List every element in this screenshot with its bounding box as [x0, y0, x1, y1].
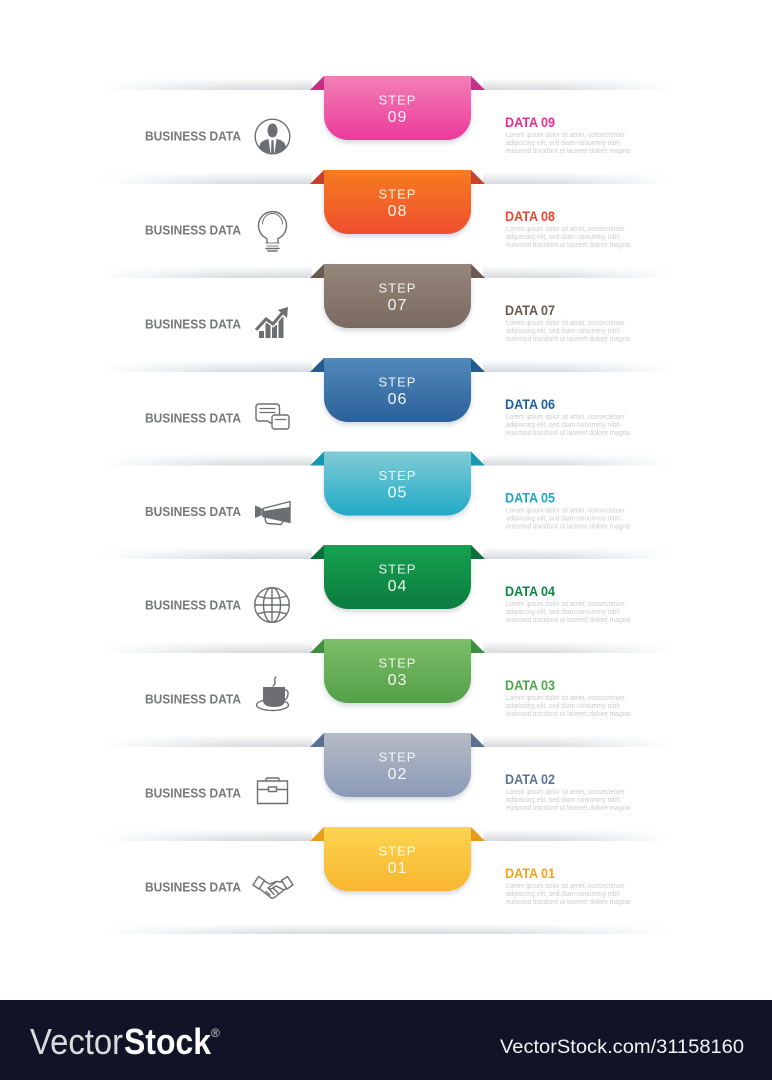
- text: data 01: Lorem ipsum dolor sit amet, consectetuer: [506, 881, 625, 890]
- tab: step 09: 09: [388, 109, 407, 126]
- text: data 05: [505, 490, 631, 530]
- text: data 02: Lorem ipsum dolor sit amet, consectetuer: [506, 787, 625, 796]
- tab: step 06: [310, 358, 485, 425]
- text: data 03: DATA 03: [505, 677, 555, 693]
- footer logo: Stock: [124, 1021, 212, 1062]
- text: data 05: euismod tincidunt ut laoreet dolore magna: [506, 522, 631, 530]
- text: data 02: adipiscing elit, sed diam nonummy nibh: [506, 795, 620, 804]
- tab: step 03: STEP: [379, 656, 416, 670]
- text: data 03: euismod tincidunt ut laoreet dolore magna: [506, 709, 631, 718]
- row: step 04: [100, 545, 673, 624]
- label: business data: BUSINESS DATA: [145, 130, 241, 144]
- text: data 03: Lorem ipsum dolor sit amet, consectetuer: [506, 693, 625, 702]
- icon: megaphone: [255, 502, 290, 524]
- tab: step 08: 08: [388, 203, 407, 220]
- text: data 01: DATA 01: [505, 865, 555, 881]
- label: business data: BUSINESS DATA: [145, 505, 241, 519]
- row: step 03: [100, 639, 673, 718]
- text: data 06: Lorem ipsum dolor sit amet, consectetuer: [506, 412, 625, 421]
- tab: step 01: [310, 827, 485, 894]
- label: business data: BUSINESS DATA: [145, 598, 241, 612]
- text: data 07: euismod tincidunt ut laoreet dolore magna: [506, 334, 631, 343]
- text: data 04: [505, 583, 631, 624]
- tab: step 02: [310, 733, 485, 800]
- text: data 09: euismod tincidunt ut laoreet dolore magna: [506, 146, 631, 155]
- row: step 08: [100, 170, 673, 251]
- text: data 08: adipiscing elit, sed diam nonummy nibh: [506, 232, 620, 241]
- text: data 07: [505, 302, 631, 343]
- tab: step 07: STEP: [379, 280, 416, 296]
- text: data 01: euismod tincidunt ut laoreet dolore magna: [506, 897, 631, 906]
- text: data 03: adipiscing elit, sed diam nonummy nibh: [506, 701, 620, 710]
- tab: step 02: 02: [388, 766, 407, 783]
- footer id: VectorStock.com/31158160: [500, 1037, 744, 1058]
- text: data 07: Lorem ipsum dolor sit amet, consectetuer: [506, 318, 625, 327]
- text: data 04: euismod tincidunt ut laoreet dolore magna: [506, 615, 631, 624]
- icon: growth chart: [256, 307, 288, 338]
- footer logo: Vector: [30, 1021, 123, 1062]
- tab: step 04: 04: [388, 578, 407, 595]
- tab: step 04: STEP: [379, 562, 416, 576]
- text: data 09: Lorem ipsum dolor sit amet, consectetuer: [506, 130, 625, 139]
- text: data 02: [505, 771, 631, 812]
- text: data 08: [505, 208, 631, 249]
- text: data 07: DATA 07: [505, 302, 555, 318]
- text: data 02: euismod tincidunt ut laoreet dolore magna: [506, 803, 631, 812]
- icon: handshake: [253, 876, 293, 898]
- text: data 03: [505, 677, 631, 718]
- tab: step 08: [310, 170, 485, 237]
- text: data 05: adipiscing elit, sed diam nonummy nibh: [506, 514, 620, 522]
- tab: step 04: [310, 545, 485, 612]
- row: step 06: [100, 358, 673, 437]
- tab: step 06: STEP: [379, 374, 416, 390]
- footer logo: [30, 1021, 220, 1062]
- footer logo: ®: [211, 1026, 220, 1040]
- label: business data: BUSINESS DATA: [145, 318, 241, 332]
- bottom shadow line: [100, 924, 673, 934]
- footer bar: [0, 1000, 772, 1080]
- tab: step 03: 03: [388, 672, 407, 689]
- icon: light bulb: [258, 212, 286, 251]
- tab: step 07: [310, 264, 485, 331]
- row: step 01: [100, 827, 673, 906]
- text: data 04: adipiscing elit, sed diam nonummy nibh: [506, 607, 620, 616]
- text: data 05: DATA 05: [505, 490, 555, 506]
- text: data 02: DATA 02: [505, 771, 555, 787]
- text: data 04: Lorem ipsum dolor sit amet, consectetuer: [506, 599, 625, 608]
- text: data 04: DATA 04: [505, 583, 555, 599]
- text: data 09: adipiscing elit, sed diam nonummy nibh: [506, 138, 620, 147]
- tab: step 05: 05: [388, 484, 407, 502]
- tab: step 03: [310, 639, 485, 706]
- text: data 06: [505, 396, 631, 437]
- label: business data: BUSINESS DATA: [145, 224, 241, 238]
- text: data 08: DATA 08: [505, 208, 555, 224]
- row: step 02: [100, 733, 673, 812]
- icon: businessman: [255, 119, 290, 154]
- tab: step 09: STEP: [379, 92, 416, 108]
- text: data 08: Lorem ipsum dolor sit amet, consectetuer: [506, 224, 625, 233]
- tab: step 08: STEP: [379, 186, 416, 202]
- text: data 08: euismod tincidunt ut laoreet dolore magna: [506, 240, 631, 249]
- text: data 06: DATA 06: [505, 396, 555, 412]
- tab: step 05: [310, 452, 485, 518]
- tab: step 01: 01: [388, 860, 407, 877]
- tab: step 01: STEP: [379, 844, 416, 858]
- icon: chat bubbles: [256, 404, 289, 429]
- row: step 07: [100, 264, 673, 343]
- tab: step 09: [310, 76, 485, 143]
- text: data 07: adipiscing elit, sed diam nonummy nibh: [506, 326, 620, 335]
- icon: globe: [255, 588, 289, 622]
- label: business data: BUSINESS DATA: [145, 880, 241, 894]
- label: business data: BUSINESS DATA: [145, 692, 241, 706]
- text: data 01: [505, 865, 631, 906]
- text: data 09: DATA 09: [505, 114, 555, 130]
- label: business data: BUSINESS DATA: [145, 412, 241, 426]
- text: data 09: [505, 114, 631, 155]
- text: data 01: adipiscing elit, sed diam nonummy nibh: [506, 889, 620, 898]
- icon: coffee cup: [256, 677, 288, 710]
- row: step 09: [100, 76, 673, 155]
- tab: step 07: 07: [388, 297, 407, 314]
- tab: step 06: 06: [388, 391, 407, 408]
- text: data 05: Lorem ipsum dolor sit amet, consectetuer: [506, 506, 625, 514]
- label: business data: BUSINESS DATA: [145, 786, 241, 800]
- icon: briefcase: [258, 778, 288, 804]
- row: step 05: [100, 452, 673, 530]
- tab: step 02: STEP: [379, 750, 416, 764]
- text: data 06: adipiscing elit, sed diam nonummy nibh: [506, 420, 620, 429]
- text: data 06: euismod tincidunt ut laoreet dolore magna: [506, 428, 631, 437]
- tab: step 05: STEP: [379, 468, 416, 483]
